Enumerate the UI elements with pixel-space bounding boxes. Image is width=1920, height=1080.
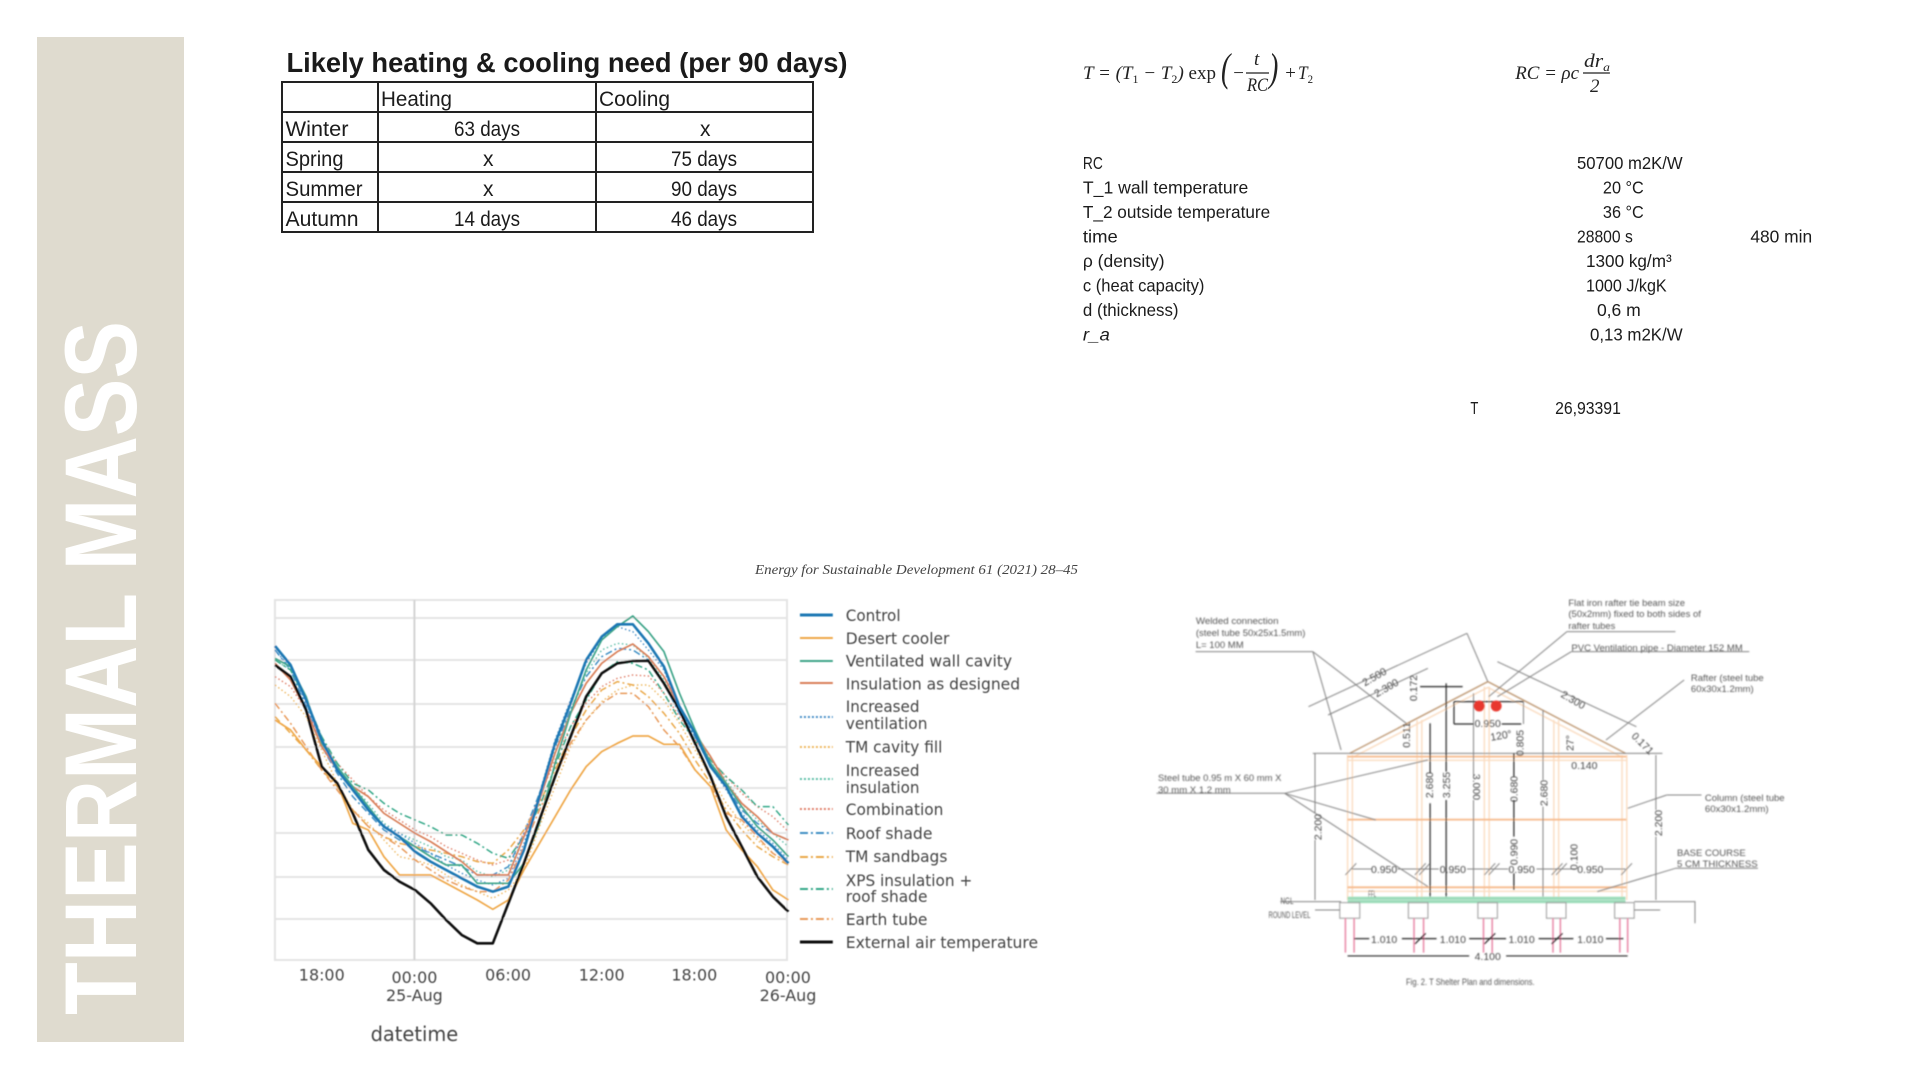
dimensions: 1.010: [1509, 935, 1535, 946]
plot area and grid: [275, 600, 787, 960]
table: heating and cooling need: Summer: [286, 178, 362, 201]
text block: parameter labels: d (thickness): [1083, 300, 1179, 320]
text block: parameter labels: [1083, 153, 1270, 345]
dimensions: 3.000: [1470, 774, 1481, 800]
dimensions: [1313, 666, 1665, 963]
legend: Roof shade: [846, 824, 932, 843]
table: heating and cooling need: x: [700, 118, 711, 141]
formula: RC: RC = ρc: [1514, 63, 1580, 84]
legend: Increased: [846, 697, 919, 716]
dimensions: 3.255: [1442, 772, 1453, 798]
dimensions: 0.171: [1629, 731, 1655, 758]
annotations: Welded connection: [1196, 616, 1279, 627]
dimensions: 0.950: [1577, 865, 1604, 876]
annotations: 30 mm X 1.2 mm: [1158, 785, 1231, 796]
table: heating and cooling need: 90 days: [671, 178, 737, 201]
dimensions: 2.680: [1539, 780, 1550, 806]
table: heating and cooling need: x: [483, 178, 494, 201]
text block: parameter values: 20 °C: [1603, 177, 1644, 198]
formula: temperature: − T: [1139, 63, 1173, 84]
dimensions: 0.511: [1402, 722, 1413, 748]
dimensions: 1.010: [1371, 935, 1397, 946]
text block: result T: T: [1470, 398, 1478, 418]
annotations: Flat iron rafter tie beam size: [1568, 598, 1685, 609]
table: heating and cooling need: x: [483, 148, 494, 171]
legend: ventilation: [846, 714, 927, 733]
dimensions: 0.950: [1475, 719, 1501, 730]
x axis labels: 25-Aug: [386, 986, 443, 1005]
ventilation pipes: [1474, 700, 1502, 712]
dimensions: 120°: [1490, 729, 1513, 744]
heading: THERMAL MASS: THERMAL MASS: [44, 321, 158, 1015]
text block: parameter values: 1000 J/kgK: [1586, 275, 1667, 296]
table: heating and cooling need: 46 days: [671, 208, 737, 231]
table: heating and cooling need: Heating: [381, 88, 452, 111]
dimensions: 2.300: [1559, 689, 1587, 712]
x axis labels: 00:00: [765, 968, 811, 987]
x axis labels: [299, 965, 816, 1005]
annotations: Column (steel tube: [1705, 793, 1785, 804]
text block: parameter values: [1577, 153, 1812, 345]
legend: XPS insulation +: [846, 871, 972, 890]
dimensions: 0.140: [1571, 761, 1598, 772]
table: heating and cooling need: 63 days: [454, 118, 520, 141]
annotations: NGL: [1281, 896, 1293, 907]
text block: result T: [1470, 398, 1621, 418]
formula: temperature: (: [1221, 46, 1232, 90]
table: heating and cooling need: 75 days: [671, 148, 737, 171]
formula: RC: [1514, 51, 1610, 97]
table: heating and cooling need: Autumn: [286, 208, 358, 231]
annotations: Steel tube 0.95 m X 60 mm X: [1158, 773, 1282, 784]
table: heating and cooling need: Winter: [286, 118, 348, 141]
dimensions: 0.950: [1371, 865, 1397, 876]
legend: TM sandbags: [845, 847, 947, 866]
dimensions: 1.010: [1577, 935, 1604, 946]
text block: parameter labels: T_2 outside temperature: [1083, 202, 1270, 223]
table: heating and cooling need: Cooling: [599, 88, 670, 111]
dimensions: 0.680: [1510, 776, 1521, 802]
text block: parameter values: 0,13 m2K/W: [1590, 324, 1683, 345]
x axis labels: 26-Aug: [760, 986, 816, 1005]
x axis labels: 12:00: [579, 965, 625, 985]
text block: parameter labels: RC: [1083, 153, 1103, 173]
table: heating and cooling need: Spring: [286, 148, 344, 171]
x axis labels: 18:00: [299, 965, 345, 985]
dimensions: 2.500: [1361, 666, 1389, 689]
legend: Desert cooler: [846, 629, 950, 648]
formula: temperature: 2: [1171, 72, 1177, 86]
table: heating and cooling need: [282, 82, 813, 232]
text block: parameter values: 0,6 m: [1597, 300, 1641, 320]
citation: Energy for Sustainable Development 61 (2021) 28–45: [754, 563, 1078, 578]
annotations: (50x2mm) fixed to both sides of: [1568, 609, 1701, 620]
dimensions: 1.010: [1440, 935, 1466, 946]
annotations: 60x30x1.2mm): [1705, 804, 1769, 815]
formula: temperature: T: [1298, 63, 1309, 84]
annotations: [1158, 598, 1785, 988]
formula: temperature: ): [1176, 63, 1189, 84]
table: heating and cooling need: 14 days: [454, 208, 520, 231]
text block: parameter values: 36 °C: [1603, 202, 1644, 222]
annotations: Rafter (steel tube: [1691, 673, 1764, 684]
dimensions: 2.680: [1425, 772, 1436, 798]
dimensions: 0.990: [1510, 839, 1521, 865]
text block: parameter labels: c (heat capacity): [1083, 275, 1204, 296]
text block: parameter values: 480 min: [1750, 226, 1812, 247]
annotations: ROUND LEVEL: [1269, 910, 1310, 921]
data lines: [275, 616, 788, 943]
formula: temperature: RC: [1246, 75, 1268, 96]
heading: table title: Likely heating & cooling need (per 90 days): [286, 47, 848, 78]
legend: [800, 606, 1038, 952]
legend: Increased: [846, 761, 919, 780]
dimensions: 0.100: [1569, 844, 1580, 870]
dimensions: 2.200: [1313, 814, 1324, 840]
legend: External air temperature: [846, 933, 1038, 952]
legend: Insulation as designed: [846, 674, 1020, 694]
dimensions: 2.300: [1373, 677, 1401, 700]
x axis labels: 18:00: [671, 965, 717, 985]
annotations: FFL: [1368, 889, 1376, 900]
formula: temperature: T = (T: [1083, 63, 1132, 84]
structure lines: [1157, 632, 1758, 956]
legend: Control: [846, 606, 901, 625]
text block: parameter values: 1300 kg/m³: [1586, 251, 1672, 271]
annotations: 60x30x1.2mm): [1691, 684, 1754, 695]
formula: RC: dr: [1584, 51, 1601, 72]
dimensions: 0.172: [1409, 675, 1420, 701]
text block: parameter labels: time: [1083, 226, 1118, 247]
dimensions: 0.805: [1516, 730, 1527, 756]
formula: temperature: 1: [1133, 72, 1139, 86]
text block: parameter labels: T_1 wall temperature: [1083, 177, 1248, 199]
formula: temperature: −: [1232, 63, 1245, 84]
annotations: rafter tubes: [1568, 621, 1615, 632]
diagram: T-shelter section drawing: [1157, 598, 1785, 988]
formula: RC: 2: [1590, 76, 1600, 97]
legend: insulation: [846, 778, 919, 797]
formula: RC: a: [1603, 60, 1610, 74]
formula: temperature: ): [1267, 46, 1278, 90]
annotations: 5 CM THICKNESS: [1677, 859, 1758, 870]
text block: parameter values: 28800 s: [1577, 226, 1633, 247]
text block: parameter labels: r_a: [1083, 324, 1110, 345]
text block: parameter values: 50700 m2K/W: [1577, 153, 1683, 173]
dimensions: 27°: [1565, 735, 1576, 751]
formula: temperature: 2: [1308, 72, 1313, 86]
x axis labels: 00:00: [391, 968, 437, 987]
formula: temperature: +: [1284, 63, 1297, 84]
annotations: BASE COURSE: [1677, 848, 1746, 859]
annotations: Fig. 2. T Shelter Plan and dimensions.: [1406, 977, 1535, 988]
dimensions: 2.200: [1654, 810, 1665, 836]
text block: parameter labels: ρ (density): [1083, 251, 1165, 271]
x axis title: datetime: [371, 1022, 458, 1046]
annotations: PVC Ventilation pipe - Diameter 152 MM: [1571, 643, 1743, 654]
legend: Combination: [846, 800, 943, 819]
panel: sidebar with vertical title: [37, 37, 184, 1042]
legend: Ventilated wall cavity: [846, 651, 1012, 671]
formula: temperature: t: [1254, 49, 1260, 70]
chart: temperature line chart: [275, 600, 1038, 1046]
formula: temperature: [1083, 46, 1313, 96]
annotations: (steel tube 50x25x1.5mm): [1196, 628, 1305, 639]
x axis labels: 06:00: [485, 965, 531, 985]
dimensions: 0.950: [1440, 865, 1466, 876]
formula: temperature: exp: [1189, 63, 1216, 84]
dimensions: 4.100: [1475, 952, 1501, 963]
legend: roof shade: [846, 887, 927, 906]
annotations: L= 100 MM: [1196, 640, 1244, 651]
dimensions: 0.950: [1509, 865, 1535, 876]
text block: result T: 26,93391: [1555, 398, 1621, 418]
legend: Earth tube: [846, 910, 927, 929]
legend: TM cavity fill: [845, 737, 942, 757]
